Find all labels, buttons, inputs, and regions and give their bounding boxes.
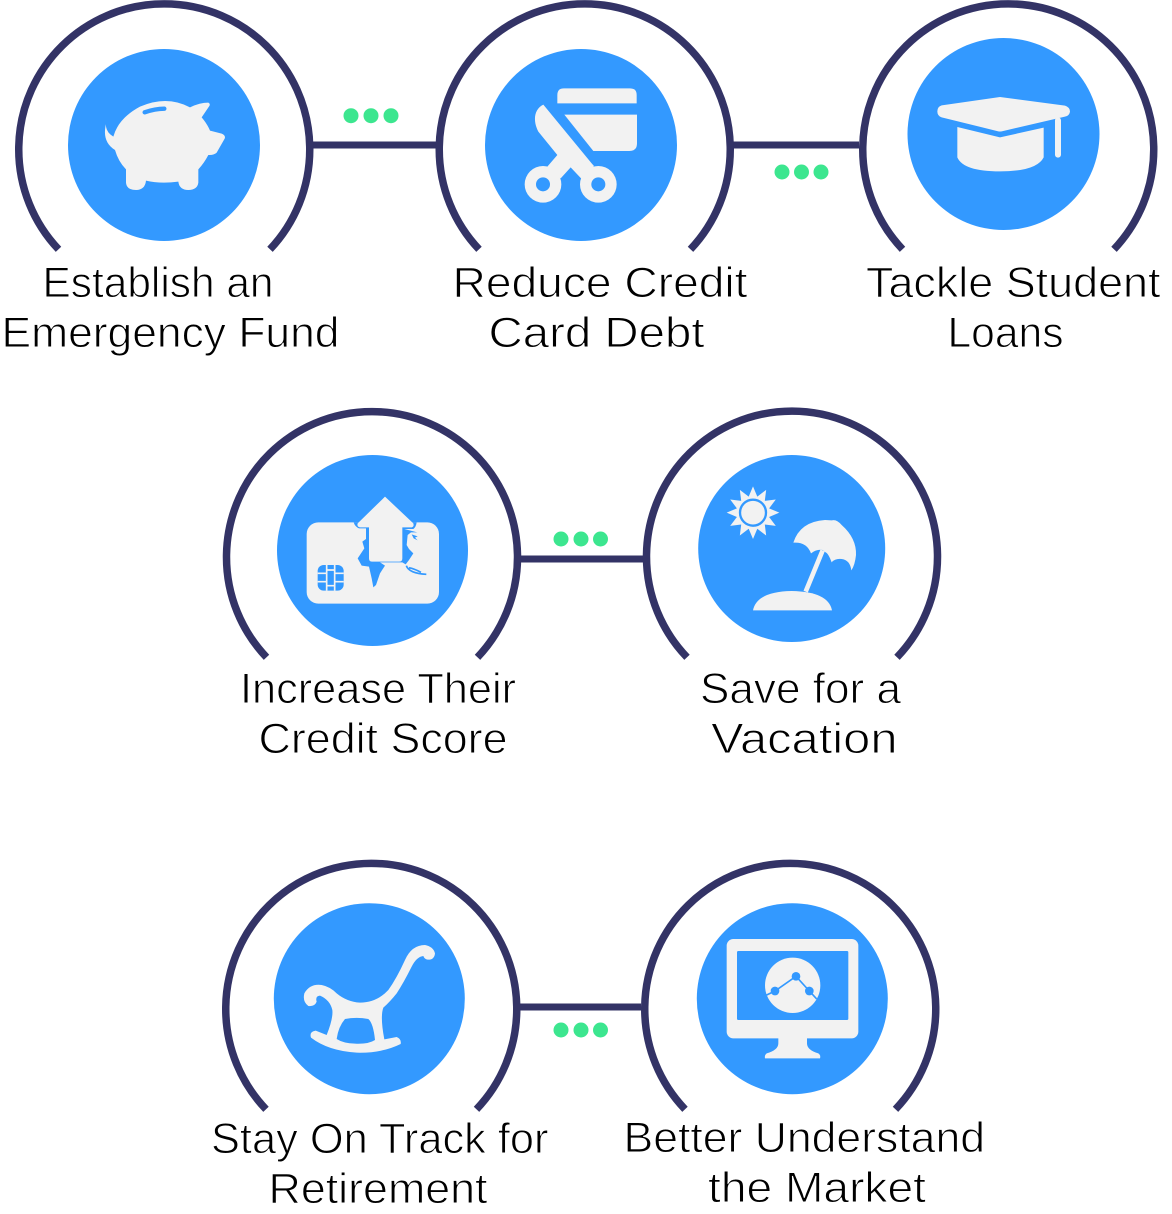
arc ring (646, 411, 938, 657)
connector with dots: retirement to market (520, 1007, 641, 1038)
label: Better Understand (624, 1115, 985, 1162)
arc ring (226, 412, 518, 657)
label: Reduce Credit (452, 260, 748, 307)
label: Stay On Track for (211, 1116, 548, 1163)
label: Emergency Fund (2, 310, 340, 357)
label: Card Debt (488, 310, 705, 357)
connector with dots: credit score to vacation (521, 532, 644, 559)
label (452, 260, 748, 357)
arc ring (439, 4, 730, 249)
label: the Market (708, 1165, 926, 1212)
label (700, 666, 901, 763)
arc ring (863, 4, 1154, 249)
icon: rocking chair (274, 903, 465, 1094)
label: Establish an (42, 260, 274, 307)
panel: increase their credit score (226, 412, 518, 763)
label (866, 260, 1161, 357)
connector with dots: credit card debt to student loans (733, 145, 859, 180)
panel: tackle student loans (863, 4, 1161, 357)
arc ring (19, 4, 310, 249)
icon: credit card with up arrow (277, 455, 468, 646)
panel: save for a vacation (646, 411, 938, 763)
label: Save for a (700, 666, 901, 713)
connector with dots: emergency fund to credit card debt (313, 108, 436, 145)
panel: stay on track for retirement (211, 863, 548, 1213)
label: Credit Score (258, 716, 508, 763)
label (240, 666, 516, 763)
panel: better understand the market (624, 863, 985, 1212)
label: Vacation (711, 716, 898, 763)
label (2, 260, 340, 357)
arc ring (226, 863, 517, 1109)
label: Loans (948, 310, 1064, 357)
icon: piggy bank (68, 49, 260, 241)
icon: sun and beach umbrella (698, 455, 885, 642)
label (624, 1115, 985, 1212)
icon: graduation cap (908, 38, 1100, 230)
icon: scissors cutting a credit card (485, 49, 677, 241)
label: Tackle Student (866, 260, 1161, 307)
arc ring (645, 863, 936, 1109)
panel: establish an emergency fund (2, 4, 340, 357)
label: Retirement (268, 1166, 488, 1213)
panel: reduce credit card debt (439, 4, 748, 357)
label (211, 1116, 548, 1213)
label: Increase Their (240, 666, 516, 713)
icon: monitor with chart (697, 903, 888, 1094)
